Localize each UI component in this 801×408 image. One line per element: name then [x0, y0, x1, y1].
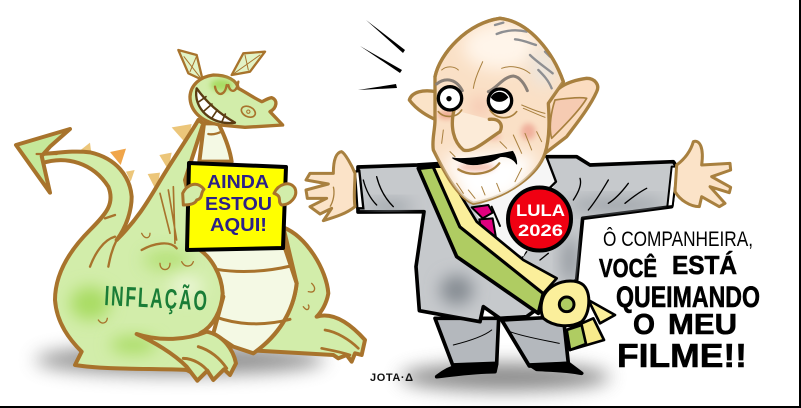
mouth: [453, 151, 517, 165]
dragon back leg: [257, 227, 365, 362]
head: [409, 18, 598, 207]
sign text: AINDA: [207, 172, 269, 192]
president: [358, 157, 677, 377]
belly bands: [217, 266, 291, 324]
legs: [435, 317, 568, 366]
hand shape: [306, 152, 355, 221]
sign: [187, 163, 286, 250]
presidential sash: [418, 167, 615, 350]
rosette centre: [559, 297, 574, 312]
front foot toes: [183, 347, 227, 372]
nose: [452, 110, 501, 151]
line 2: ESTÁ: [672, 250, 737, 280]
tail and body lines: [37, 154, 315, 323]
line 2: VOCÊ: [599, 253, 657, 283]
rosette: [541, 281, 589, 326]
dragon head: [190, 75, 283, 127]
line 4: [633, 309, 737, 341]
speech text: [599, 228, 760, 374]
line 1: Ô COMPANHEIRA,: [603, 228, 753, 251]
jacket shading: [367, 200, 667, 305]
front foot: [137, 332, 236, 381]
head shape: [190, 75, 283, 127]
jacket creases: [363, 177, 647, 260]
green band: [418, 167, 543, 313]
motion lines: [358, 20, 405, 90]
grin with teeth: [196, 88, 235, 123]
beard strokes: [450, 132, 542, 198]
neck collar line: [208, 131, 223, 134]
button disc: [508, 188, 571, 250]
yellow band: [433, 167, 557, 293]
face: [433, 18, 563, 203]
left cuff: [355, 171, 363, 208]
cheek creases: [442, 105, 545, 143]
line 4: MEU: [668, 309, 737, 341]
left ear: [409, 91, 437, 120]
button text: 2026: [518, 221, 563, 240]
eyebrows: [437, 80, 462, 91]
sign text: ESTOU: [205, 194, 272, 214]
eye sockets: [438, 110, 517, 118]
body shading: [70, 250, 203, 353]
right hand: [675, 141, 731, 207]
dragon neck front: [199, 123, 232, 162]
campaign button: [508, 188, 571, 250]
tie: [472, 205, 500, 242]
ground shadow: dragon: [35, 345, 325, 375]
line 5: FILME!!: [617, 337, 747, 374]
line 4: O: [633, 309, 655, 341]
lower lip: [458, 163, 499, 174]
nostril swirl: [240, 104, 257, 119]
shirt: [473, 157, 555, 257]
signature: JOTA·Δ: [370, 372, 413, 384]
sign text: AQUI!: [210, 215, 267, 235]
eye: [215, 82, 238, 94]
cuff: [667, 167, 677, 207]
line 3: QUEIMANDO: [616, 281, 760, 314]
dragon: [16, 50, 365, 381]
gray hair strokes: [495, 23, 553, 88]
left eye: [438, 87, 462, 110]
dragon spikes: [77, 124, 192, 192]
button text: LULA: [516, 201, 565, 220]
right ear: [545, 78, 598, 153]
palm lines: [330, 187, 334, 207]
tail tip: [16, 129, 70, 193]
sign board: [187, 163, 286, 250]
lapel line: [547, 157, 556, 188]
right eye: [488, 89, 512, 112]
sign text: [205, 172, 272, 235]
button text: [516, 201, 565, 240]
forehead wrinkles: [442, 62, 530, 88]
ground shadow: president: [400, 363, 610, 391]
face shading: [438, 23, 557, 207]
ribbon tails: [588, 300, 615, 323]
shoes: [437, 363, 582, 377]
jacket and sleeves: [358, 157, 677, 322]
dragon ears: [178, 50, 265, 80]
left hand: [306, 152, 363, 221]
dragon label: INFLAÇÃO: [104, 279, 210, 316]
back foot toes: [322, 330, 358, 355]
dragon hands: [183, 184, 296, 205]
head highlight: [210, 79, 233, 91]
dragon belly: [197, 243, 297, 353]
inner ear: [550, 98, 587, 138]
dragon body and tail: [37, 120, 223, 377]
head outline top: [435, 18, 563, 82]
line 2: [599, 250, 737, 283]
